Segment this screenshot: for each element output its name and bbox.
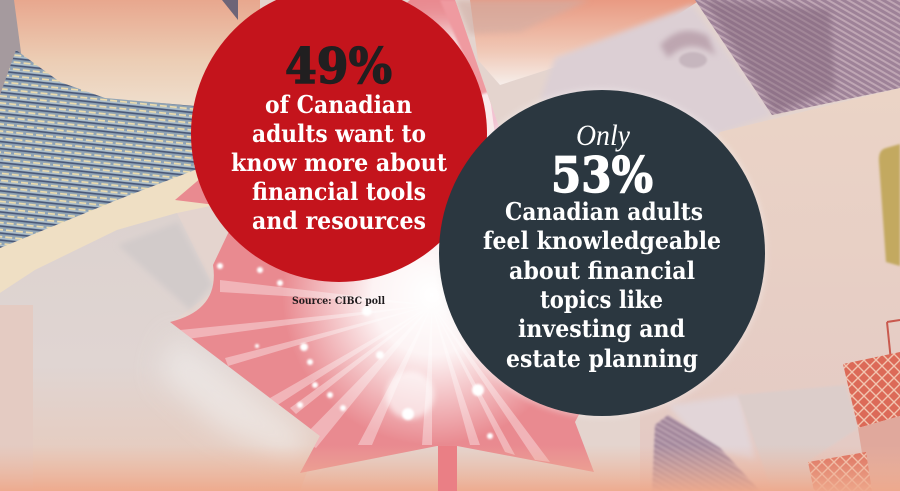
note: top centre dark corner <box>222 0 238 20</box>
lens flare <box>386 371 434 419</box>
note: lower left pale panel <box>0 213 320 491</box>
text: dark circle description <box>483 197 721 373</box>
text: dark circle description: topics like <box>540 285 663 314</box>
note: far left sheet <box>0 305 33 491</box>
note: gold chip <box>879 144 900 266</box>
note: engraving above wedge <box>455 0 590 34</box>
light rays <box>180 280 550 462</box>
pink flag between circles <box>491 105 498 130</box>
sparkles <box>216 262 494 440</box>
note: translucent pale fold <box>738 385 858 491</box>
note: lavender engraving above purple <box>668 395 755 460</box>
note: portrait eye <box>679 52 707 68</box>
text: red circle description: and resources <box>252 206 426 235</box>
text: red circle description: of Canadian <box>265 90 412 119</box>
note: pale lavender portrait area <box>540 5 772 140</box>
note: upper left cream <box>0 0 260 120</box>
text: dark circle description: estate planning <box>506 344 698 373</box>
text: red circle description: know more about <box>231 148 447 177</box>
note: red mesh patch lower <box>808 452 872 491</box>
stat: 49%: 49% <box>285 37 392 95</box>
pink strip upper spire <box>441 0 487 96</box>
pale upper spire <box>424 12 499 138</box>
note: pink ruled patch <box>858 416 900 491</box>
text: dark circle description: feel knowledgeable <box>483 226 721 255</box>
note: peach wedge top centre <box>470 0 700 85</box>
note: small print patch <box>118 222 212 310</box>
maple leaf stem <box>438 446 457 491</box>
bottom peach fade <box>0 445 900 491</box>
text: red circle description: adults want to <box>252 119 426 148</box>
text: dark circle description: Canadian adults <box>505 197 703 226</box>
note: red mesh patch upper <box>843 352 900 428</box>
note: pale card right <box>640 88 900 491</box>
note: red outline square <box>887 320 900 400</box>
central glow <box>290 242 527 438</box>
note: dark hair strokes <box>705 0 835 112</box>
maple leaf with light burst <box>170 0 594 473</box>
panel: dark stat circle <box>439 90 765 416</box>
text: dark circle description: about financial <box>509 256 695 285</box>
note: far left stripe edge <box>0 0 22 110</box>
note: twisted cream edge <box>0 168 215 293</box>
source note: Source: CIBC poll <box>292 296 385 307</box>
note: blue striped engraving <box>0 50 200 250</box>
text: red circle description <box>231 90 447 235</box>
text: red circle description: financial tools <box>252 177 426 206</box>
stat: 53%: 53% <box>551 146 653 204</box>
label: Only: Only <box>576 119 631 152</box>
note: purple engraving upper right <box>695 0 900 115</box>
note: pale haze beside leaf <box>160 335 310 462</box>
text: dark circle description: investing and <box>518 314 685 343</box>
note: purple engraving lower <box>652 415 760 491</box>
panel: red stat circle <box>191 0 487 282</box>
soft halo behind dark circle <box>437 88 767 418</box>
note: portrait brow <box>660 31 716 58</box>
